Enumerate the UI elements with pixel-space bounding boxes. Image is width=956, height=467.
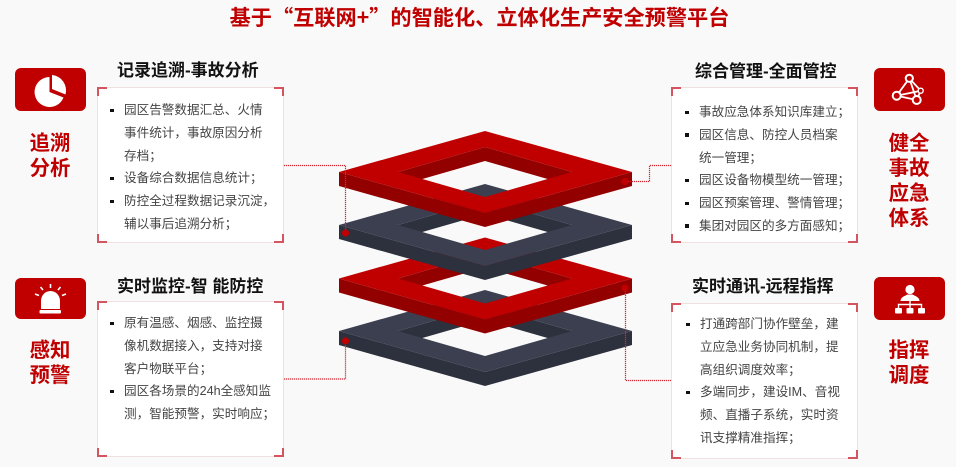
text: management list: 事故应急体系知识库建立； — [699, 105, 850, 119]
text: records list: 防控全过程数据记录沉淀， — [124, 194, 275, 208]
label: perception warning — [30, 339, 70, 387]
layer 1: top red ring — [339, 131, 632, 227]
label: emergency system: 健全 — [889, 133, 929, 155]
text: monitoring list: 园区各场景的24h全感知监 — [124, 384, 271, 398]
label: command dispatch: 调度 — [889, 365, 929, 387]
label: trace analysis — [30, 132, 70, 180]
icon: network — [874, 68, 945, 111]
connector: bottom-left panel to base layer — [284, 337, 349, 379]
panel: real-time communication — [671, 303, 858, 459]
text: management list — [685, 105, 850, 233]
label: perception warning: 感知 — [30, 340, 70, 362]
text: records list: 设备综合数据信息统计； — [124, 171, 263, 185]
text: records list: 辅以事后追溯分析； — [124, 217, 237, 231]
label: trace analysis: 追溯 — [30, 133, 70, 155]
layer 2: dark ring — [339, 184, 632, 280]
text: monitoring list: 像机数据接入，支持对接 — [124, 339, 263, 353]
icon: organisation chart — [874, 277, 945, 320]
text: records list — [110, 103, 275, 231]
text: monitoring list: 测，智能预警，实时响应； — [124, 407, 275, 421]
panel: records and analysis — [97, 87, 284, 243]
text: management list: 园区信息、防控人员档案 — [699, 128, 838, 142]
text: management list: 园区预案管理、警情管理； — [699, 196, 850, 210]
label: emergency system: 体系 — [889, 208, 929, 230]
heading: records: 记录追溯-事故分析 — [117, 61, 259, 80]
text: management list: 集团对园区的多方面感知； — [699, 219, 850, 233]
panel: real-time monitoring — [97, 301, 284, 457]
label: emergency system — [888, 132, 929, 230]
layer 3: red ring — [339, 238, 632, 334]
text: communication list: 讯支撑精准指挥； — [700, 431, 801, 445]
text: communication list: 多端同步，建设IM、音视 — [700, 385, 840, 399]
text: monitoring list: 原有温感、烟感、监控摄 — [124, 316, 263, 330]
text: monitoring list — [110, 316, 275, 421]
text: records list: 园区告警数据汇总、火情 — [124, 103, 263, 117]
icon: alarm light — [15, 278, 86, 319]
text: communication list: 立应急业务协同机制，提 — [700, 340, 839, 354]
heading: communication: 实时通讯-远程指挥 — [692, 277, 834, 296]
label: perception warning: 预警 — [30, 365, 70, 387]
text: communication list: 频、直播子系统，实时资 — [700, 408, 839, 422]
text: management list: 园区设备物模型统一管理； — [699, 173, 850, 187]
label: command dispatch: 指挥 — [889, 340, 929, 362]
text: communication list: 高组织调度效率； — [700, 362, 801, 376]
connector: bottom-right panel to red layer — [621, 284, 671, 380]
text: records list: 存档； — [124, 148, 162, 162]
text: monitoring list: 客户物联平台； — [124, 362, 212, 376]
text: communication list: 打通跨部门协作壁垒，建 — [700, 317, 839, 331]
connector: top-left panel to dark layer — [284, 166, 349, 237]
label: emergency system: 应急 — [889, 183, 929, 205]
icon: pie chart — [15, 68, 86, 111]
text: communication list — [686, 317, 840, 445]
connector: top-right panel to top red layer — [621, 166, 671, 185]
heading: monitoring: 实时监控-智 能防控 — [117, 277, 263, 296]
layer 4: dark base ring — [339, 290, 632, 386]
heading: integrated management: 综合管理-全面管控 — [695, 62, 837, 81]
text: management list: 统一管理； — [699, 150, 762, 164]
label: emergency system: 事故 — [889, 158, 929, 180]
label: command dispatch — [889, 339, 929, 387]
title: 基于“互联网+”的智能化、立体化生产安全预警平台 — [230, 1, 729, 32]
panel: integrated management — [671, 87, 858, 243]
text: records list: 事件统计，事故原因分析 — [124, 126, 263, 140]
label: trace analysis: 分析 — [30, 158, 70, 180]
